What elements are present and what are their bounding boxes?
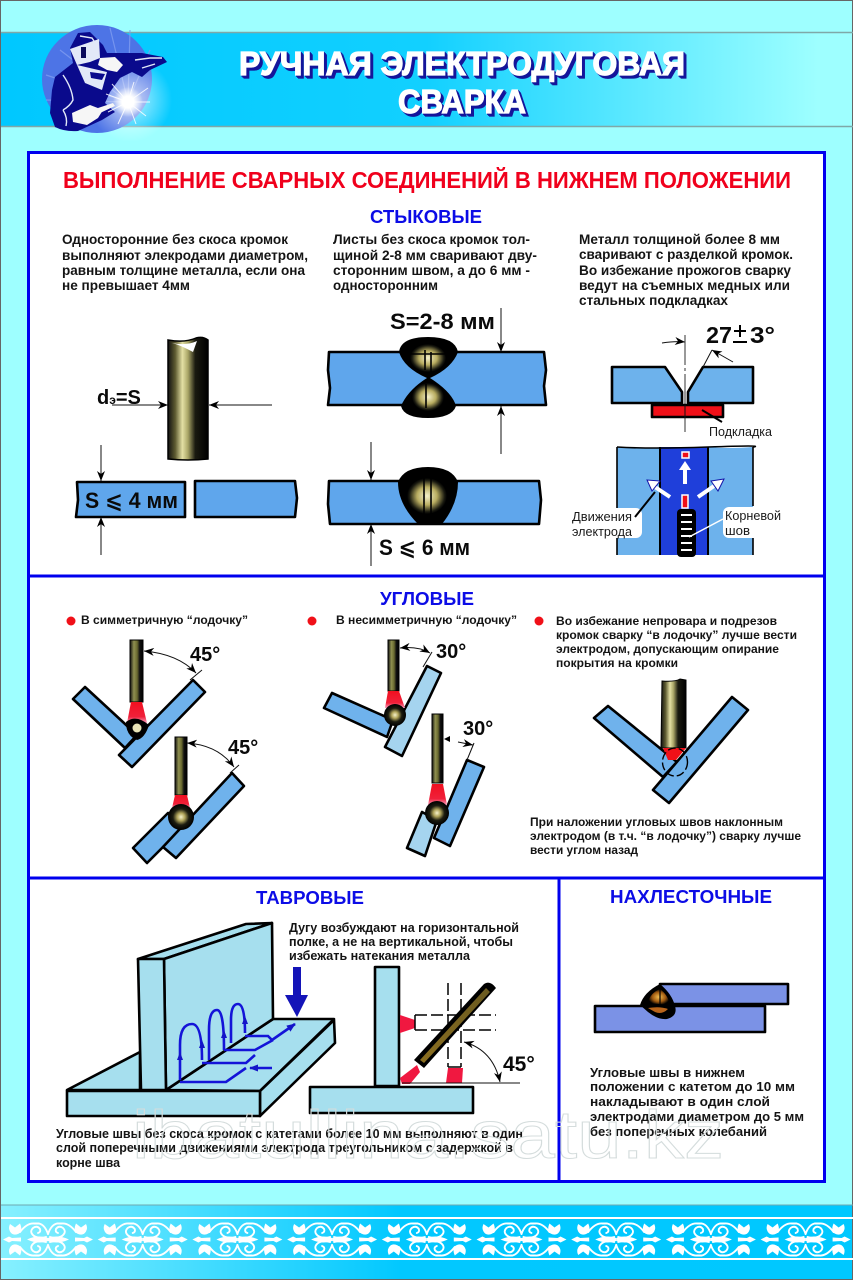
- text block: column 3: ведут на съемных медных или: [579, 278, 790, 293]
- text block: column 3: Металл толщиной более 8 мм: [579, 232, 780, 247]
- diagram: asymmetric fillet lower: 30°: [463, 718, 493, 740]
- heading: butt: СТЫКОВЫЕ: [370, 207, 482, 227]
- title: [239, 45, 685, 120]
- text block: column 2: сторонним швом, а до 6 мм -: [333, 263, 530, 278]
- text block: arc ignition: полке, а не на вертикальной, чтобы: [289, 935, 513, 949]
- text block: arc ignition: [289, 921, 519, 963]
- text block: column 3: стальных подкладках: [579, 293, 728, 308]
- text block: column 1: выполняют элекродами диаметром,: [62, 248, 308, 263]
- main heading: ВЫПОЛНЕНИЕ СВАРНЫХ СОЕДИНЕНИЙ В НИЖНЕМ ПОЛОЖЕНИИ: [63, 166, 791, 193]
- text block: column 2: односторонним: [333, 278, 438, 293]
- diagram: symmetric fillet lower: [133, 737, 258, 863]
- text block: lap note: без поперечных колебаний: [590, 1125, 767, 1139]
- heading: T joints: ТАВРОВЫЕ: [256, 888, 364, 908]
- diagram: electrode movement: [572, 446, 783, 557]
- diagram: electrode movement: шов: [725, 523, 750, 538]
- diagram: double-sided weld: [328, 308, 546, 454]
- icon: welder emblem: [42, 25, 172, 142]
- diagram: asymmetric fillet lower: [407, 714, 493, 856]
- diagram: T joint section: 45°: [503, 1053, 535, 1076]
- diagram: lap weld: [595, 984, 788, 1032]
- title: СВАРКА: [398, 83, 526, 120]
- watermark: ibatullina.satu.kz: [132, 1097, 724, 1173]
- panel: butt joints: [62, 207, 793, 566]
- text block: arc ignition: Дугу возбуждают на горизонтальной: [289, 921, 519, 935]
- diagram: T joint section: [310, 967, 535, 1113]
- text block: backward angle note: [530, 815, 801, 857]
- diagram: electrode and thin plate: S ⩽ 4 мм: [85, 488, 178, 513]
- text block: column 1: не превышает 4мм: [62, 278, 190, 293]
- text block: backward angle note: электродом (в т.ч. “в лодочку”) сварку лучше: [530, 829, 801, 843]
- text block: column 1: [62, 232, 308, 293]
- diagram: beveled edges with backing: 3°: [750, 322, 775, 348]
- text block: backward angle note: вести углом назад: [530, 843, 638, 857]
- diagram: fillet with resting electrode: [594, 679, 748, 803]
- diagram: electrode movement: Движения: [572, 509, 632, 524]
- diagram: 3D T joint: [67, 923, 335, 1116]
- bullet: third recommendation: покрытия на кромки: [556, 656, 678, 670]
- footer ornament band: [1, 1205, 853, 1279]
- diagram: electrode movement: электрода: [572, 524, 633, 539]
- text block: lap note: электродами диаметром до 5 мм: [590, 1110, 804, 1124]
- diagram: symmetric fillet upper: 45°: [190, 644, 220, 666]
- text block: T joint note: Угловые швы без скоса кромок с катетами более 10 мм выполняют в один: [56, 1127, 523, 1141]
- text block: T joint note: корне шва: [56, 1156, 121, 1170]
- panel: T joints: [56, 888, 535, 1170]
- bullet: third recommendation: Во избежание непровара и подрезов: [556, 614, 777, 628]
- text block: column 1: Односторонние без скоса кромок: [62, 232, 288, 247]
- text block: column 3: сваривают с разделкой кромок.: [579, 247, 793, 262]
- diagram: symmetric fillet upper: [73, 640, 220, 767]
- text block: lap note: положении с катетом до 10 мм: [590, 1080, 795, 1094]
- diagram: electrode and thin plate: dэ=S: [97, 387, 141, 409]
- text block: column 3: [579, 232, 793, 308]
- heading: fillet: УГЛОВЫЕ: [380, 589, 474, 609]
- bullet: symmetric boat: В симметричную “лодочку”: [81, 615, 248, 627]
- bullet: third recommendation: электродом, допускающим опирание: [556, 642, 779, 656]
- diagram: asymmetric fillet upper: [324, 640, 466, 756]
- panel: lap joints: [590, 887, 804, 1139]
- diagram: beveled edges with backing: Подкладка: [709, 424, 773, 439]
- text block: lap note: накладывают в один слой: [590, 1095, 770, 1109]
- diagram: double-sided weld: S=2-8 мм: [390, 309, 495, 334]
- bullet: asymmetric boat: В несимметричную “лодочку”: [336, 615, 517, 627]
- text block: backward angle note: При наложении угловых швов наклонным: [530, 815, 783, 829]
- text block: column 2: [333, 232, 537, 293]
- bullet: third recommendation: [534, 614, 797, 670]
- diagram: single-sided weld: S ⩽ 6 мм: [379, 535, 470, 560]
- text block: column 1: равным толщине металла, если она: [62, 263, 305, 278]
- bullet: third recommendation: кромок сварку “в лодочку” лучше вести: [556, 628, 797, 642]
- diagram: electrode movement: Корневой: [725, 508, 781, 523]
- header band: [1, 32, 853, 127]
- diagram: asymmetric fillet upper: 30°: [436, 641, 466, 663]
- panel: fillet joints: [66, 589, 801, 863]
- diagram: single-sided weld: [328, 442, 541, 566]
- text block: column 2: щиной 2-8 мм сваривают дву-: [333, 248, 537, 263]
- title: РУЧНАЯ ЭЛЕКТРОДУГОВАЯ: [239, 45, 685, 82]
- text block: lap note: [590, 1066, 804, 1139]
- text block: T joint note: слой поперечными движениями электрода треугольником с задержкой в: [56, 1141, 513, 1155]
- main panel frame: [28, 152, 825, 1182]
- text block: arc ignition: избежать натекания металла: [289, 949, 471, 963]
- text block: column 3: Во избежание прожогов сварку: [579, 263, 791, 278]
- diagram: beveled edges with backing: [612, 322, 775, 439]
- diagram: beveled edges with backing: 27: [706, 322, 732, 348]
- diagram: symmetric fillet lower: 45°: [228, 737, 258, 759]
- text block: lap note: Угловые швы в нижнем: [590, 1066, 745, 1080]
- heading: lap: НАХЛЕСТОЧНЫЕ: [610, 887, 772, 907]
- diagram: electrode and thin plate: [76, 337, 297, 555]
- text block: column 2: Листы без скоса кромок тол-: [333, 232, 530, 247]
- text block: T joint note: [56, 1127, 523, 1170]
